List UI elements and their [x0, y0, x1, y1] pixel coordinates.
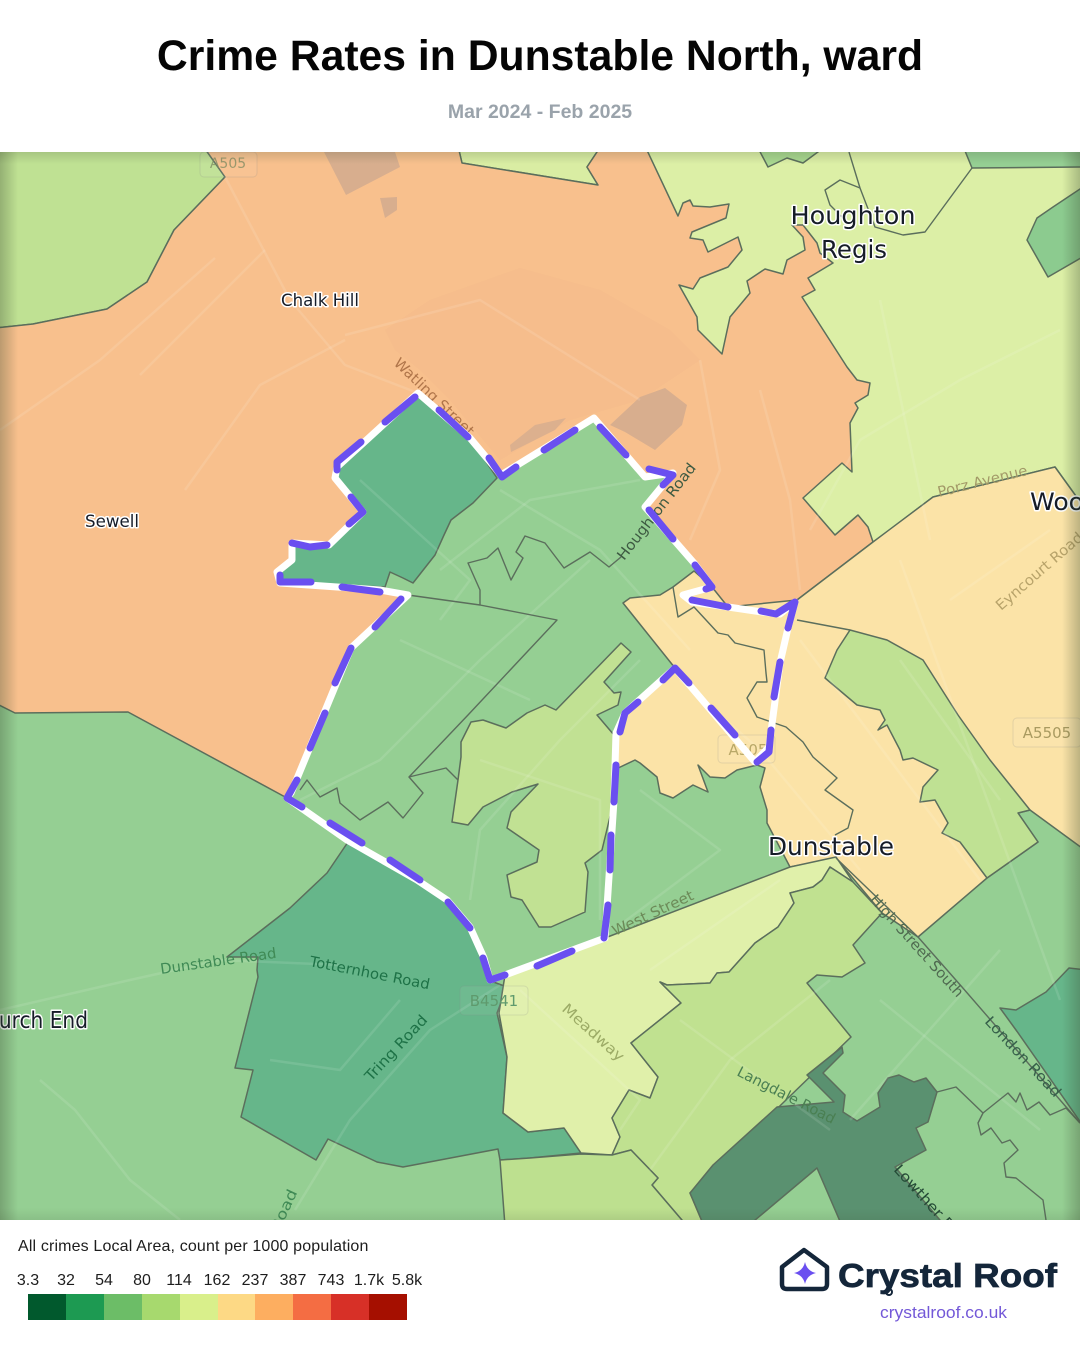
- area: upper-left pale green: [0, 146, 225, 328]
- area: orange high-rate zone: [0, 146, 873, 798]
- shield A5505: A5505: [1023, 724, 1071, 742]
- legend: [17, 1238, 422, 1320]
- subtitle: date range: Mar 2024 - Feb 2025: [448, 101, 632, 123]
- map panel: [0, 152, 1080, 1220]
- choropleth areas: [0, 146, 1080, 1226]
- icon: house with star: [782, 1250, 827, 1289]
- legend: 5.8k: [392, 1272, 422, 1289]
- road labels: Totternhoe Road: [307, 954, 431, 993]
- area: east and central pale yellow: [614, 467, 1080, 937]
- area: south-east darkest green: [690, 1047, 945, 1226]
- area: south pale green: [500, 1150, 687, 1226]
- legend: 32: [57, 1272, 75, 1289]
- logo url: crystalroof.co.uk: [880, 1304, 1008, 1322]
- road labels: [159, 355, 1080, 1256]
- road labels: Dunstable Road: [159, 946, 277, 978]
- orange darker ground: [385, 268, 700, 460]
- place labels: Chalk Hill: [281, 291, 359, 310]
- ward base green fill: [277, 393, 795, 980]
- area: south-east corner darker green: [1000, 968, 1080, 1130]
- legend colour bar: [28, 1294, 407, 1320]
- road labels: Tring Road: [361, 1012, 431, 1086]
- area: north-east pale green: [600, 146, 1080, 600]
- area: ward north-west darker green: [277, 393, 497, 587]
- area: Totternhoe darker green: [227, 842, 581, 1167]
- quarry patch: [510, 418, 566, 452]
- area: east pale green strip: [825, 630, 1038, 878]
- ward boundary: purple dashes: [280, 397, 795, 980]
- place labels: Houghton: [790, 201, 916, 230]
- industrial patch: [324, 152, 400, 195]
- road labels: West Street: [610, 888, 697, 940]
- road labels: High Street South: [866, 892, 966, 1001]
- legend: 387: [280, 1272, 306, 1289]
- area: top green wedge: [757, 146, 826, 167]
- ward boundary: [277, 393, 795, 980]
- logo wordmark: Crystal Roof: [838, 1257, 1058, 1294]
- quarry patch: [610, 388, 687, 450]
- road labels: Langdale Road: [734, 1064, 838, 1128]
- legend scale labels: [17, 1272, 422, 1289]
- road labels: London Road: [981, 1014, 1064, 1101]
- legend title: All crimes Local Area, count per 1000 population: [18, 1238, 369, 1255]
- shield A505 north: [200, 152, 257, 177]
- industrial patch: [380, 197, 397, 218]
- area: top centre pale green: [458, 146, 601, 185]
- ward boundary: white casing: [277, 393, 795, 980]
- area: Langdale pale green: [612, 867, 882, 1226]
- legend: 237: [242, 1272, 268, 1289]
- legend: 3.3: [17, 1272, 39, 1289]
- shield A5505: [1013, 718, 1080, 747]
- logo: Crystal Roof: [780, 1248, 1058, 1322]
- area: far east green: [1027, 185, 1080, 277]
- legend: 54: [95, 1272, 113, 1289]
- area: Meadway pale yellow-green: [499, 857, 853, 1155]
- title: Crime Rates in Dunstable North, ward: [157, 32, 923, 80]
- place labels: Sewell: [85, 512, 139, 531]
- legend: 80: [133, 1272, 151, 1289]
- legend: 743: [318, 1272, 344, 1289]
- road labels: Houghton Road: [615, 461, 700, 563]
- base green area: [0, 152, 1080, 1220]
- legend: 114: [166, 1272, 192, 1289]
- area: north-east corner green: [963, 146, 1080, 168]
- road shields: [200, 152, 1080, 1015]
- road labels: Porz Avenue: [936, 463, 1029, 501]
- legend: 1.7k: [354, 1272, 384, 1289]
- shield B4541: [460, 986, 528, 1015]
- internal ward and area boundaries: [300, 152, 1080, 1220]
- place labels: [0, 201, 1080, 1034]
- shield A505 central: A505: [729, 741, 767, 759]
- area: ward interior pale green: [452, 643, 631, 927]
- faint road network: [0, 177, 1060, 1220]
- shield A505 north: A505: [210, 156, 246, 172]
- road labels: Meadway: [558, 1001, 627, 1065]
- place labels: Regis: [821, 235, 887, 264]
- place labels: Dunstable: [768, 832, 894, 861]
- legend: 162: [204, 1272, 230, 1289]
- map edge vignette: [0, 152, 1080, 1220]
- shield B4541: B4541: [470, 992, 518, 1010]
- road labels: Watling Street: [390, 355, 477, 440]
- shield A505 central: [718, 735, 775, 763]
